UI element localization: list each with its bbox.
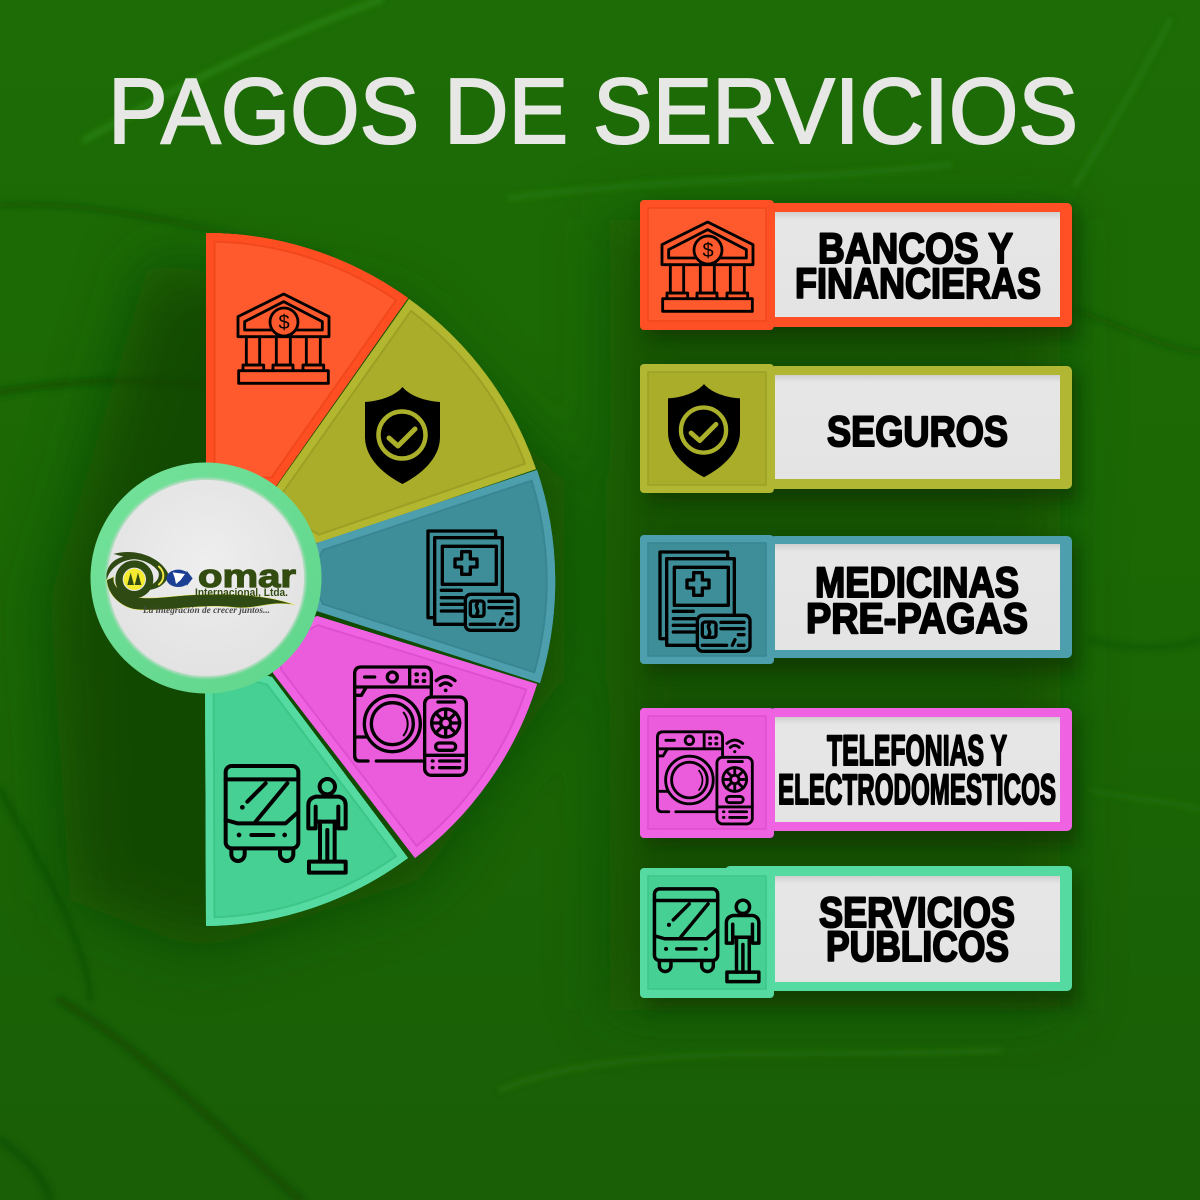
logo: Comar Internacional: La integración de crecer juntos... <box>142 606 270 616</box>
logo: Comar Internacional <box>106 552 296 616</box>
icon: washer and remote <box>355 667 466 775</box>
icon: medical plan <box>428 531 518 630</box>
label <box>795 225 1041 308</box>
label: FINANCIERAS <box>795 260 1041 308</box>
label: SEGUROS <box>827 408 1008 456</box>
icon: bank <box>238 294 329 383</box>
label: PUBLICOS <box>826 923 1009 971</box>
dollar sign: $ <box>278 312 290 334</box>
dollar sign <box>270 308 298 336</box>
dollar sign <box>694 236 722 264</box>
label: PRE-PAGAS <box>806 595 1028 643</box>
icon: bank <box>662 222 753 311</box>
panel: olive segment <box>260 299 536 544</box>
label: BANCOS Y <box>818 225 1013 273</box>
icon: medical plan <box>660 552 750 651</box>
panel: telefonias y electrodomesticos <box>640 708 1078 846</box>
label: TELEFONIAS Y <box>827 727 1007 775</box>
label <box>806 559 1028 643</box>
center hub <box>90 462 322 694</box>
label: MEDICINAS <box>815 559 1019 607</box>
label <box>778 727 1056 814</box>
panel: orange segment <box>206 233 408 486</box>
logo: Comar Internacional: omar <box>198 558 296 594</box>
cast shadows <box>50 220 1060 1010</box>
panel: teal segment <box>300 470 555 683</box>
icon: shield <box>365 387 440 484</box>
icon: bus and person <box>226 766 346 873</box>
label <box>819 889 1015 971</box>
panel: servicios publicos <box>640 866 1078 1006</box>
title: PAGOS DE SERVICIOS <box>108 59 1078 163</box>
panel: medicinas pre-pagas <box>640 535 1078 673</box>
label: SERVICIOS <box>819 889 1015 937</box>
panel: magenta segment <box>270 616 537 858</box>
fan diagram <box>205 233 555 926</box>
panel: green segment <box>205 660 408 926</box>
panel: seguros <box>640 364 1078 502</box>
dollar sign: $ <box>702 240 714 262</box>
icon: bus and person <box>654 889 759 982</box>
icon: shield <box>668 384 740 477</box>
logo: Comar Internacional: Internacional, Ltda. <box>195 587 288 599</box>
panel: bancos y financieras <box>640 200 1078 338</box>
icon: washer and remote <box>657 732 752 824</box>
